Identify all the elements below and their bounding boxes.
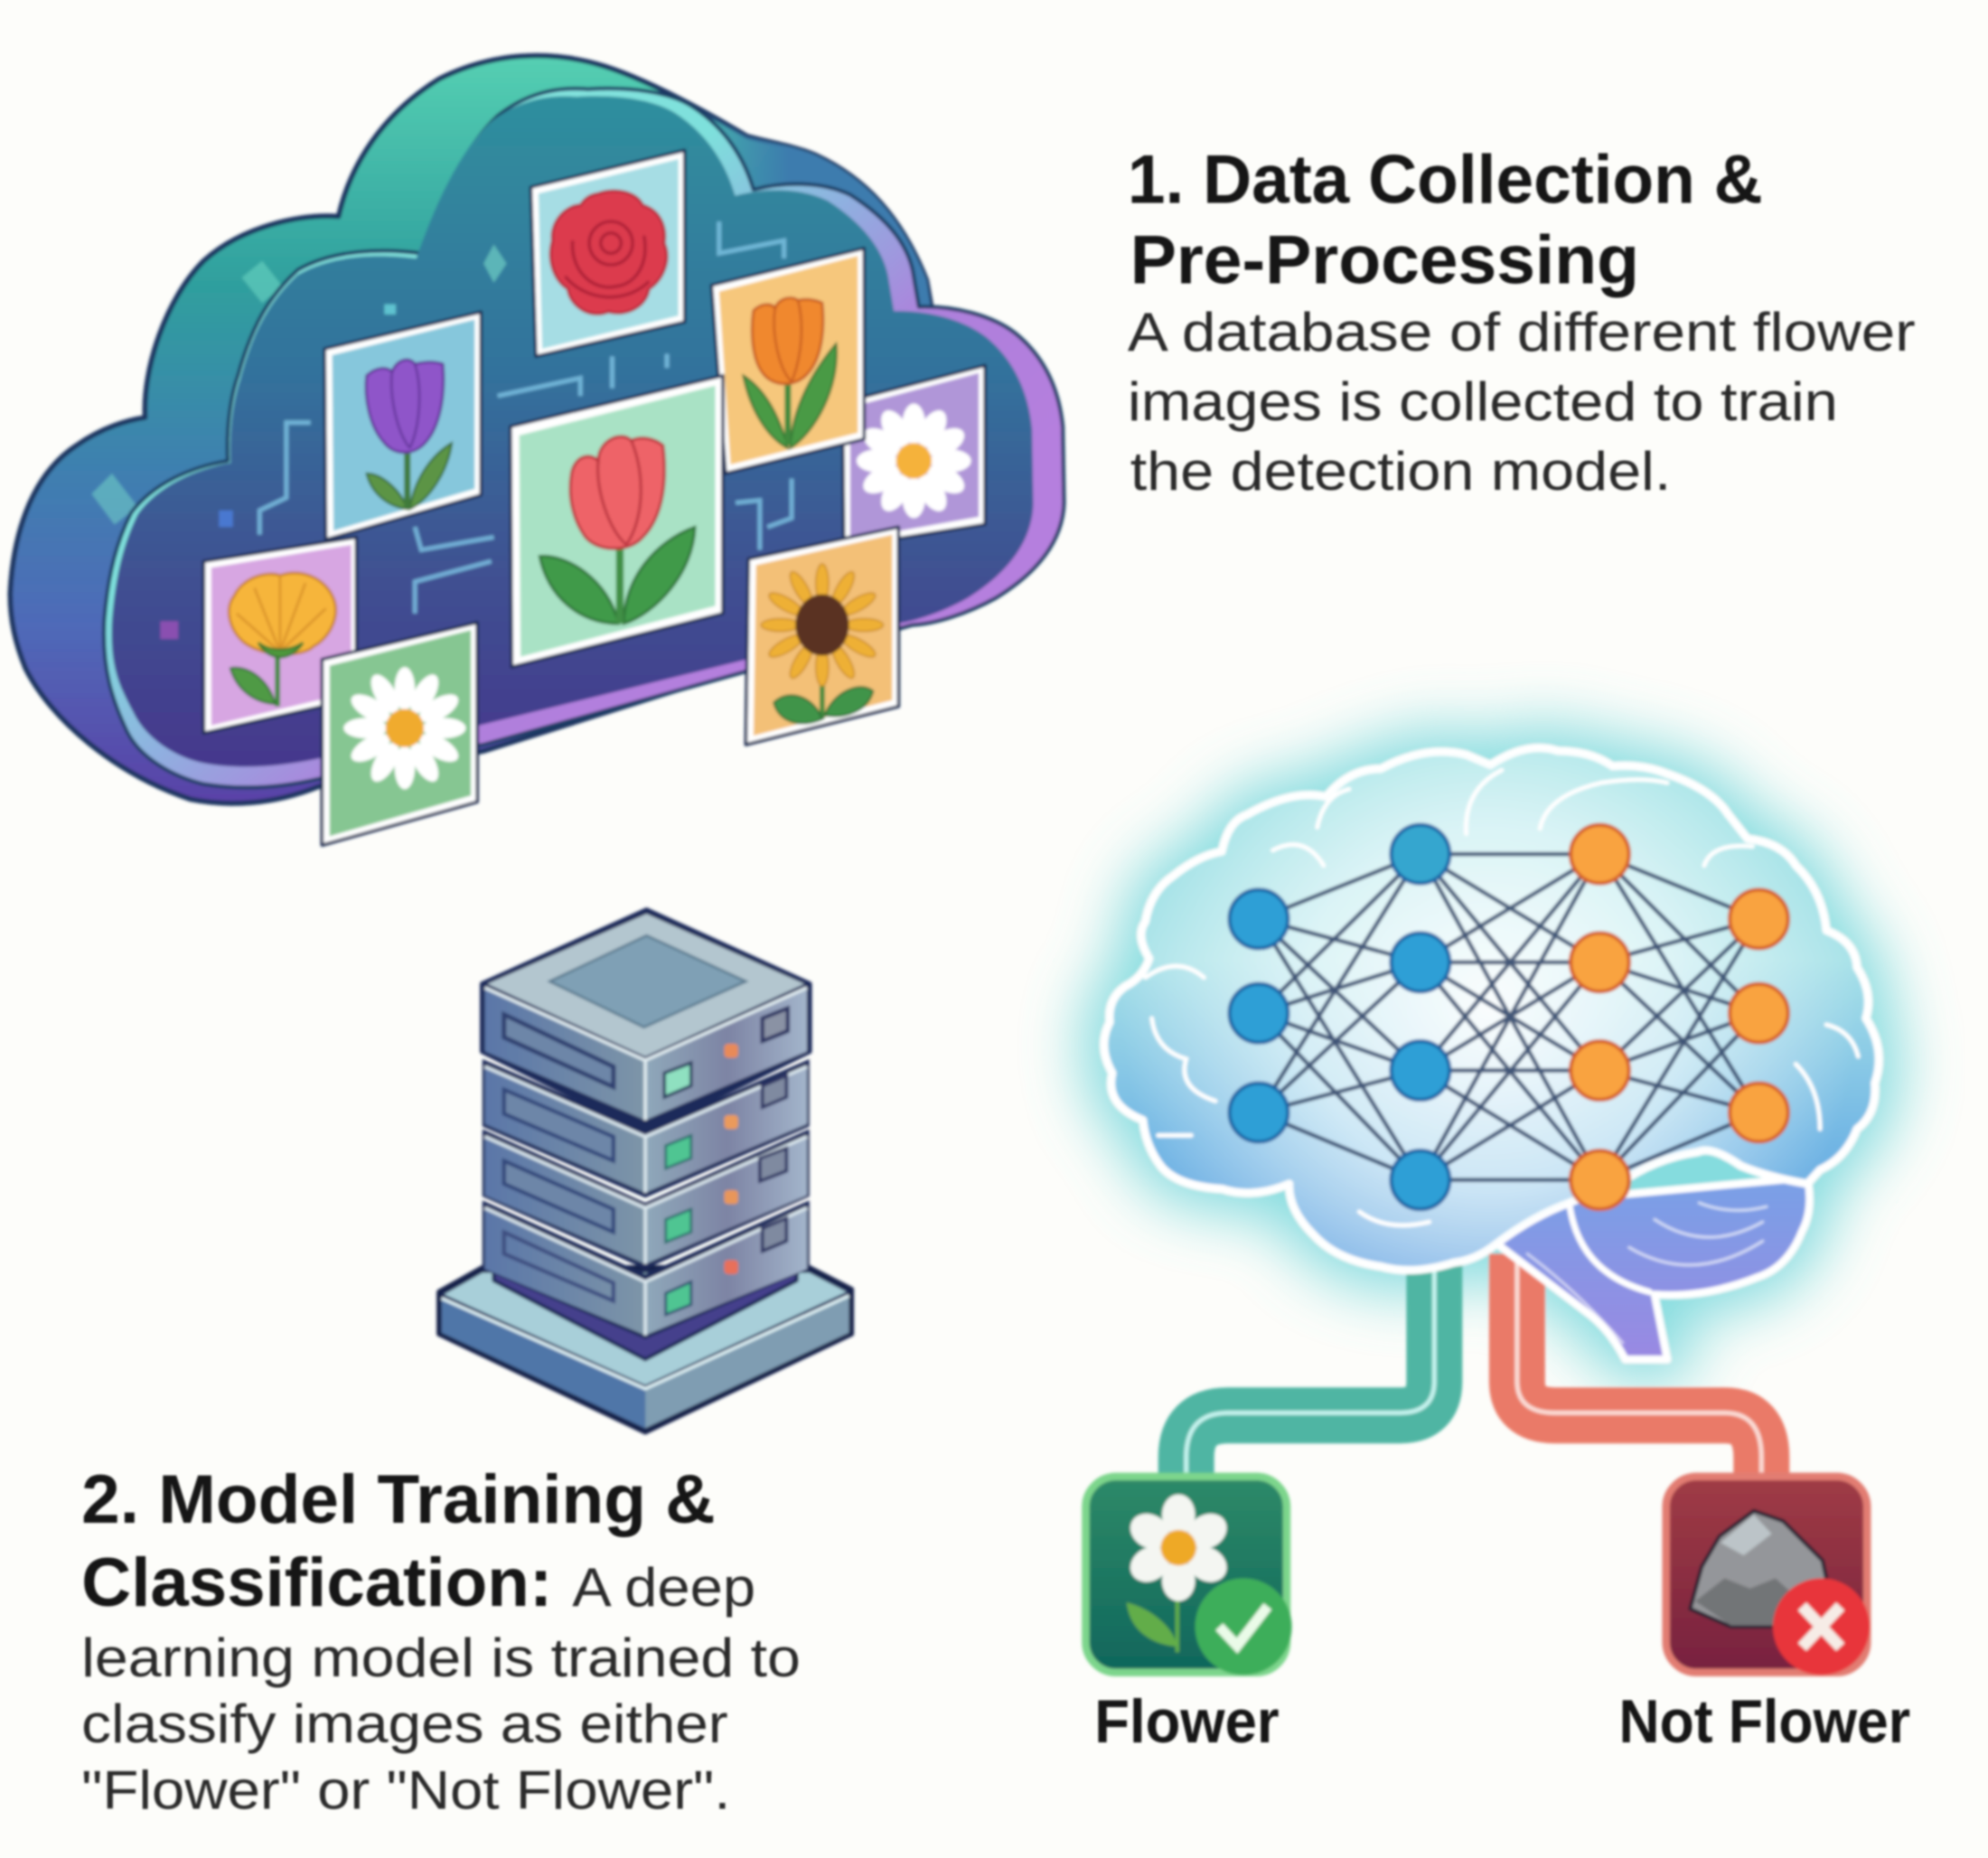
card: purple tulip	[324, 312, 481, 540]
text block: model training step: classify images as either	[81, 1693, 728, 1754]
input nodes	[1230, 825, 1449, 1209]
text block: data collection step	[1128, 142, 1916, 502]
icon: red tulip	[539, 436, 695, 624]
icon: not flower result card	[1666, 1477, 1870, 1675]
flower petals	[1124, 1495, 1233, 1601]
card: orange tulip	[711, 249, 864, 474]
cloud front face	[112, 96, 1033, 766]
card: sunflower	[746, 527, 898, 745]
rock	[1690, 1511, 1826, 1627]
heading: step 1: 1. Data Collection &	[1128, 142, 1763, 219]
cloud front rim	[104, 89, 1064, 787]
server layer 2	[483, 1059, 810, 1197]
icon: rose	[550, 191, 667, 314]
circuit dots	[160, 244, 507, 639]
card: yellow flower	[203, 537, 356, 733]
flower stem and leaf	[1129, 1591, 1177, 1652]
text block: data collection step: images is collected to train	[1128, 371, 1838, 432]
card: rose	[530, 150, 685, 356]
icon: daisy	[343, 667, 465, 789]
cloud highlights	[91, 261, 283, 524]
brain glow	[1104, 748, 1879, 1359]
icon: white daisy	[857, 404, 971, 518]
server layer 3	[483, 1129, 810, 1269]
server top layer	[483, 910, 810, 1131]
card: green daisy	[322, 623, 477, 845]
icon: orange tulip	[744, 298, 837, 448]
icon: purple tulip	[366, 360, 452, 509]
text block: data collection step: Pre-Processing	[1130, 221, 1639, 298]
cross badge	[1773, 1579, 1870, 1675]
network connections	[1259, 854, 1758, 1180]
brain lower lobe	[1464, 1178, 1810, 1359]
text block: model training step: "Flower" or "Not Flower".	[81, 1759, 730, 1820]
pipe: not flower branch	[1517, 1253, 1761, 1489]
card: central red tulip	[511, 376, 723, 667]
label: flower: Flower	[1094, 1688, 1279, 1756]
text block: model training step: learning model is trained to	[81, 1627, 801, 1688]
label: not flower: Not Flower	[1619, 1688, 1910, 1756]
heading: step 2: 2. Model Training &	[81, 1461, 716, 1538]
pipe: flower branch	[1186, 1253, 1434, 1489]
icon: flower result card	[1085, 1477, 1292, 1675]
card: purple flower on lilac	[842, 365, 985, 548]
output nodes	[1571, 825, 1788, 1209]
cloud extrusion	[10, 56, 967, 803]
brain body	[1104, 748, 1879, 1271]
description: step 1: A database of different flower	[1128, 301, 1916, 362]
icon: sunflower	[761, 564, 883, 723]
illustration: data cloud with flower images	[10, 56, 1064, 845]
server base	[439, 1260, 851, 1432]
illustration: neural network brain	[1104, 748, 1879, 1489]
description: step 2: A deep	[572, 1556, 755, 1618]
text block: data collection step: the detection model.	[1130, 440, 1671, 502]
illustration: server stack	[439, 910, 851, 1432]
cloud back shading	[688, 102, 942, 382]
circuit traces	[259, 221, 792, 614]
brain folds	[1146, 770, 1858, 1343]
server layer 4	[483, 1200, 810, 1339]
text block: model training step: Classification:	[81, 1544, 552, 1621]
check badge	[1196, 1579, 1292, 1675]
icon: yellow flower	[229, 573, 336, 707]
text block: model training step	[81, 1461, 801, 1820]
